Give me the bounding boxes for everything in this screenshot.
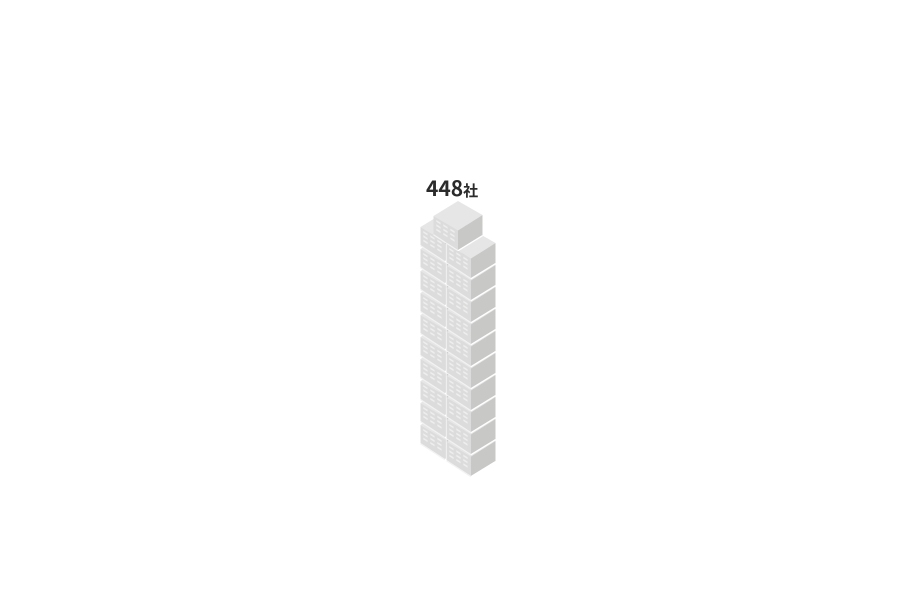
value label: 448社: 448社	[426, 173, 478, 203]
left column of building cubes	[420, 212, 470, 460]
right column of building cubes	[446, 229, 496, 477]
top building cube	[434, 201, 482, 251]
